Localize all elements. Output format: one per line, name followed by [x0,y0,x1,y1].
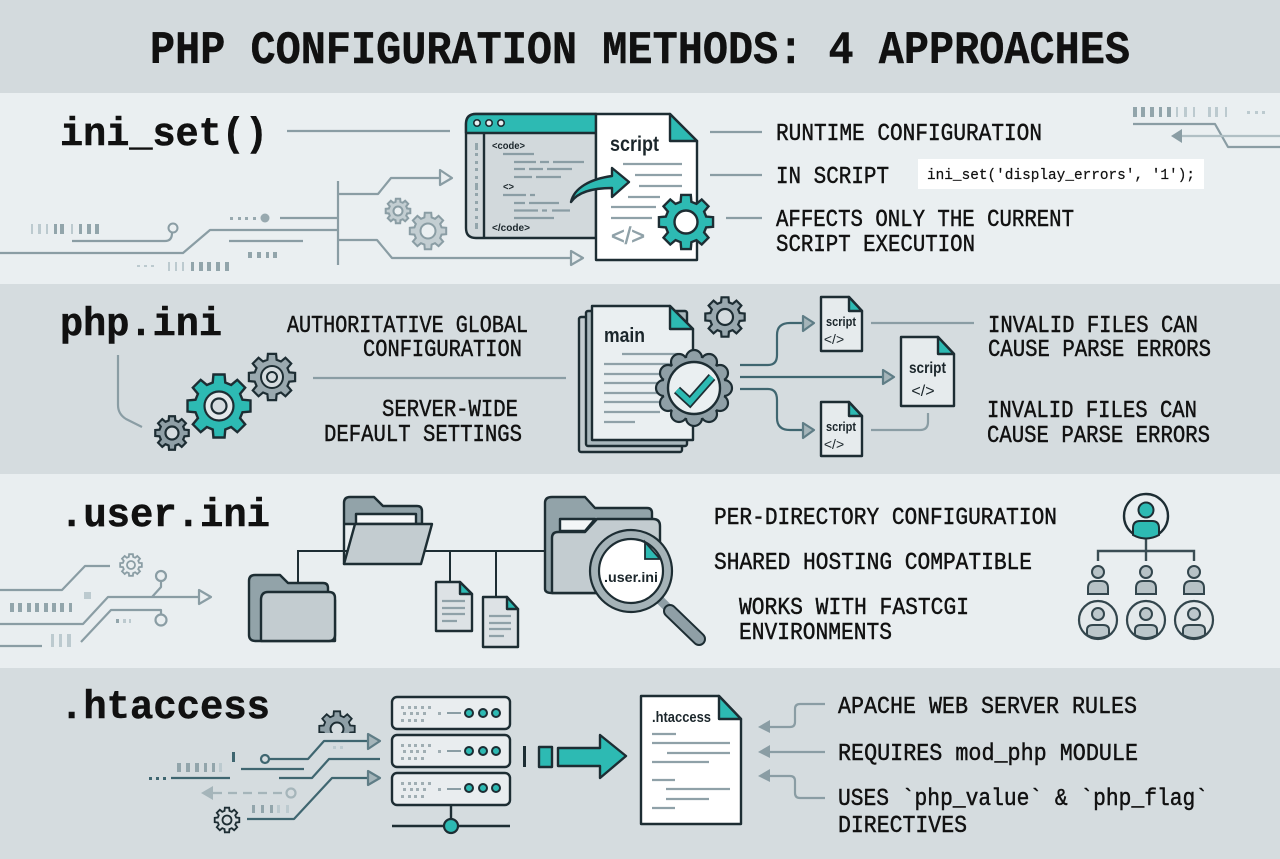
script file top [821,297,862,351]
code window: </code> [492,223,530,234]
curved teal arrow [571,168,629,202]
script file bottom: </> [824,436,844,452]
folder: open [344,497,432,564]
label: invalid files top: CAUSE PARSE ERRORS [988,337,1211,364]
gear cluster [155,354,295,450]
connector to main file [313,377,566,379]
label: server-wide default settings: DEFAULT SETTINGS [324,422,522,449]
label: authoritative global configuration: CONFIGURATION [363,337,522,364]
.htaccess document [641,696,741,824]
heading: php.ini: php.ini [60,303,222,348]
script document: script [610,133,659,156]
script document [596,114,697,260]
teal flow arrow [523,735,626,778]
gear [215,808,239,832]
label: invalid files bottom: INVALID FILES CAN [987,398,1197,425]
label: invalid files top: INVALID FILES CAN [988,313,1198,340]
circuit decoration top right [1133,107,1280,147]
code window [466,114,596,238]
code snippet box [918,159,1204,189]
label: per-directory configuration: PER-DIRECTORY CONFIGURATION [714,505,1057,532]
user hierarchy [1079,494,1213,639]
label: server-wide default settings [324,397,522,449]
file icon right [483,597,518,647]
curved connector [118,355,142,427]
file icon left [436,582,472,631]
label: in script: IN SCRIPT [776,164,889,191]
circuit lines and arrows [149,734,380,819]
teal gear [659,195,713,249]
heading: .user.ini: .user.ini [60,494,270,539]
circuit decoration [0,554,211,647]
magnifying glass [590,530,699,639]
label: works with fastcgi environments: ENVIRONMENTS [739,620,892,647]
label: apache web server rules: APACHE WEB SERVER RULES [838,694,1137,721]
label: works with fastcgi environments [739,595,969,647]
label: authoritative global configuration: AUTHORITATIVE GLOBAL [287,313,528,340]
branching arrows [740,316,894,438]
script file middle: </> [911,383,935,400]
code window: <> [503,182,514,193]
script file bottom: script [826,419,857,434]
heading: .htaccess: .htaccess [60,686,270,731]
label: works with fastcgi environments: WORKS WITH FASTCGI [739,595,969,622]
code window: <code> [492,141,525,152]
label: invalid files bottom [987,398,1210,450]
label connectors [710,132,762,218]
script file middle [901,337,954,406]
gear half [318,710,356,733]
server rack [392,697,510,833]
label: invalid files bottom: CAUSE PARSE ERRORS [987,423,1210,450]
script file middle: script [909,360,947,377]
magnifying glass: .user.ini [604,569,658,585]
panel: php.ini [60,297,1211,456]
label: affects only the current script execution: SCRIPT EXECUTION [776,232,975,259]
small gear [705,297,745,337]
label: invalid files top [988,313,1211,364]
label: uses php_value and php_flag directives: USES `php_value` & `php_flag` [838,786,1208,813]
.htaccess document: .htaccess [652,709,711,726]
label: runtime configuration: RUNTIME CONFIGURATION [776,121,1042,148]
panel: .user.ini [0,494,1213,647]
script file bottom [821,402,862,456]
label: authoritative global configuration [287,313,528,364]
label: affects only the current script execution [776,207,1074,259]
check seal [656,350,732,426]
label: affects only the current script execution: AFFECTS ONLY THE CURRENT [776,207,1074,234]
panel: .htaccess [60,686,1208,840]
incoming arrows [758,704,825,798]
circuit decoration with arrows and gears [0,170,583,271]
title: PHP CONFIGURATION METHODS: 4 APPROACHES [150,25,1130,77]
code snippet box: ini_set('display_errors', '1'); [927,168,1195,184]
label: shared hosting compatible: SHARED HOSTING COMPATIBLE [714,550,1032,577]
script file top: script [826,314,857,329]
script document: </> [611,223,645,250]
label: server-wide default settings: SERVER-WIDE [382,397,518,424]
label: requires mod_php module: REQUIRES mod_php MODULE [838,741,1138,768]
panel: ini_set() [0,107,1280,271]
folder with magnifier [545,497,660,593]
label: uses php_value and php_flag directives [838,786,1208,840]
folder: closed [249,575,335,641]
label connectors [871,323,974,430]
main config document stack: main [604,325,645,347]
label: uses php_value and php_flag directives: DIRECTIVES [838,813,967,840]
script file top: </> [824,331,844,347]
heading: ini_set(): ini_set() [60,113,268,158]
heading connector [287,130,450,132]
folder tree connectors [298,551,545,596]
main config document stack [579,306,693,452]
